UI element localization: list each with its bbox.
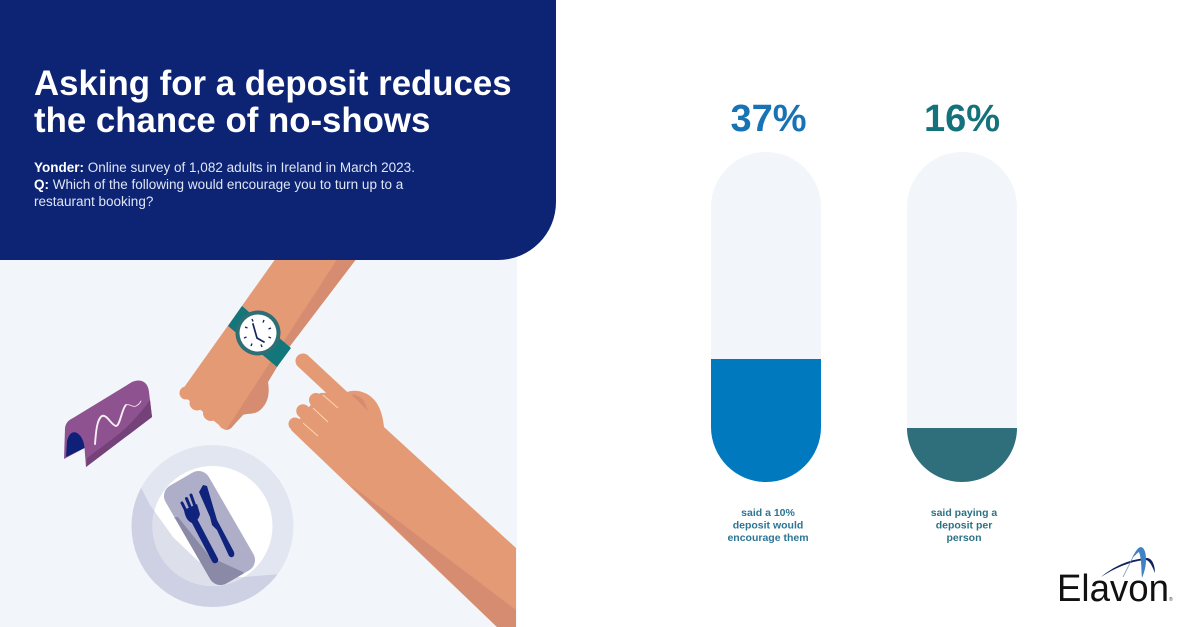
watch strap bbox=[228, 306, 291, 367]
chart: 16 percent pill bbox=[907, 98, 1017, 544]
wordmark: Elavon bbox=[1057, 568, 1169, 610]
value: 16% bbox=[924, 98, 1000, 140]
title: the chance of no-shows bbox=[34, 101, 430, 140]
value: 37% bbox=[730, 98, 807, 140]
survey note: restaurant booking? bbox=[34, 194, 153, 209]
logo: Elavon bbox=[1057, 547, 1173, 610]
panel: illustration background bbox=[0, 250, 517, 627]
chart: 37 percent pill bbox=[711, 98, 821, 544]
title: Asking for a deposit reduces bbox=[34, 64, 512, 103]
caption: said paying a bbox=[931, 507, 997, 519]
napkin bbox=[164, 471, 255, 585]
caption: deposit per bbox=[936, 520, 992, 532]
icon: plate with napkin and cutlery bbox=[132, 445, 294, 607]
watch face bbox=[236, 310, 280, 356]
registered mark: ® bbox=[1169, 596, 1173, 603]
survey note: Q: Which of the following would encourage you to turn up to a bbox=[34, 177, 403, 192]
cutlery bbox=[182, 485, 234, 560]
caption: said a 10% bbox=[741, 507, 796, 519]
caption: deposit would bbox=[733, 520, 803, 532]
survey note: Yonder: Online survey of 1,082 adults in Ireland in March 2023. bbox=[34, 160, 415, 175]
icon: purple menu card bbox=[64, 380, 152, 467]
caption: person bbox=[946, 532, 982, 544]
icon: arm with wristwatch bbox=[180, 258, 357, 430]
caption: encourage them bbox=[727, 532, 809, 544]
icon: pointing hand and arm bbox=[291, 361, 516, 627]
panel: navy header bbox=[0, 0, 556, 260]
